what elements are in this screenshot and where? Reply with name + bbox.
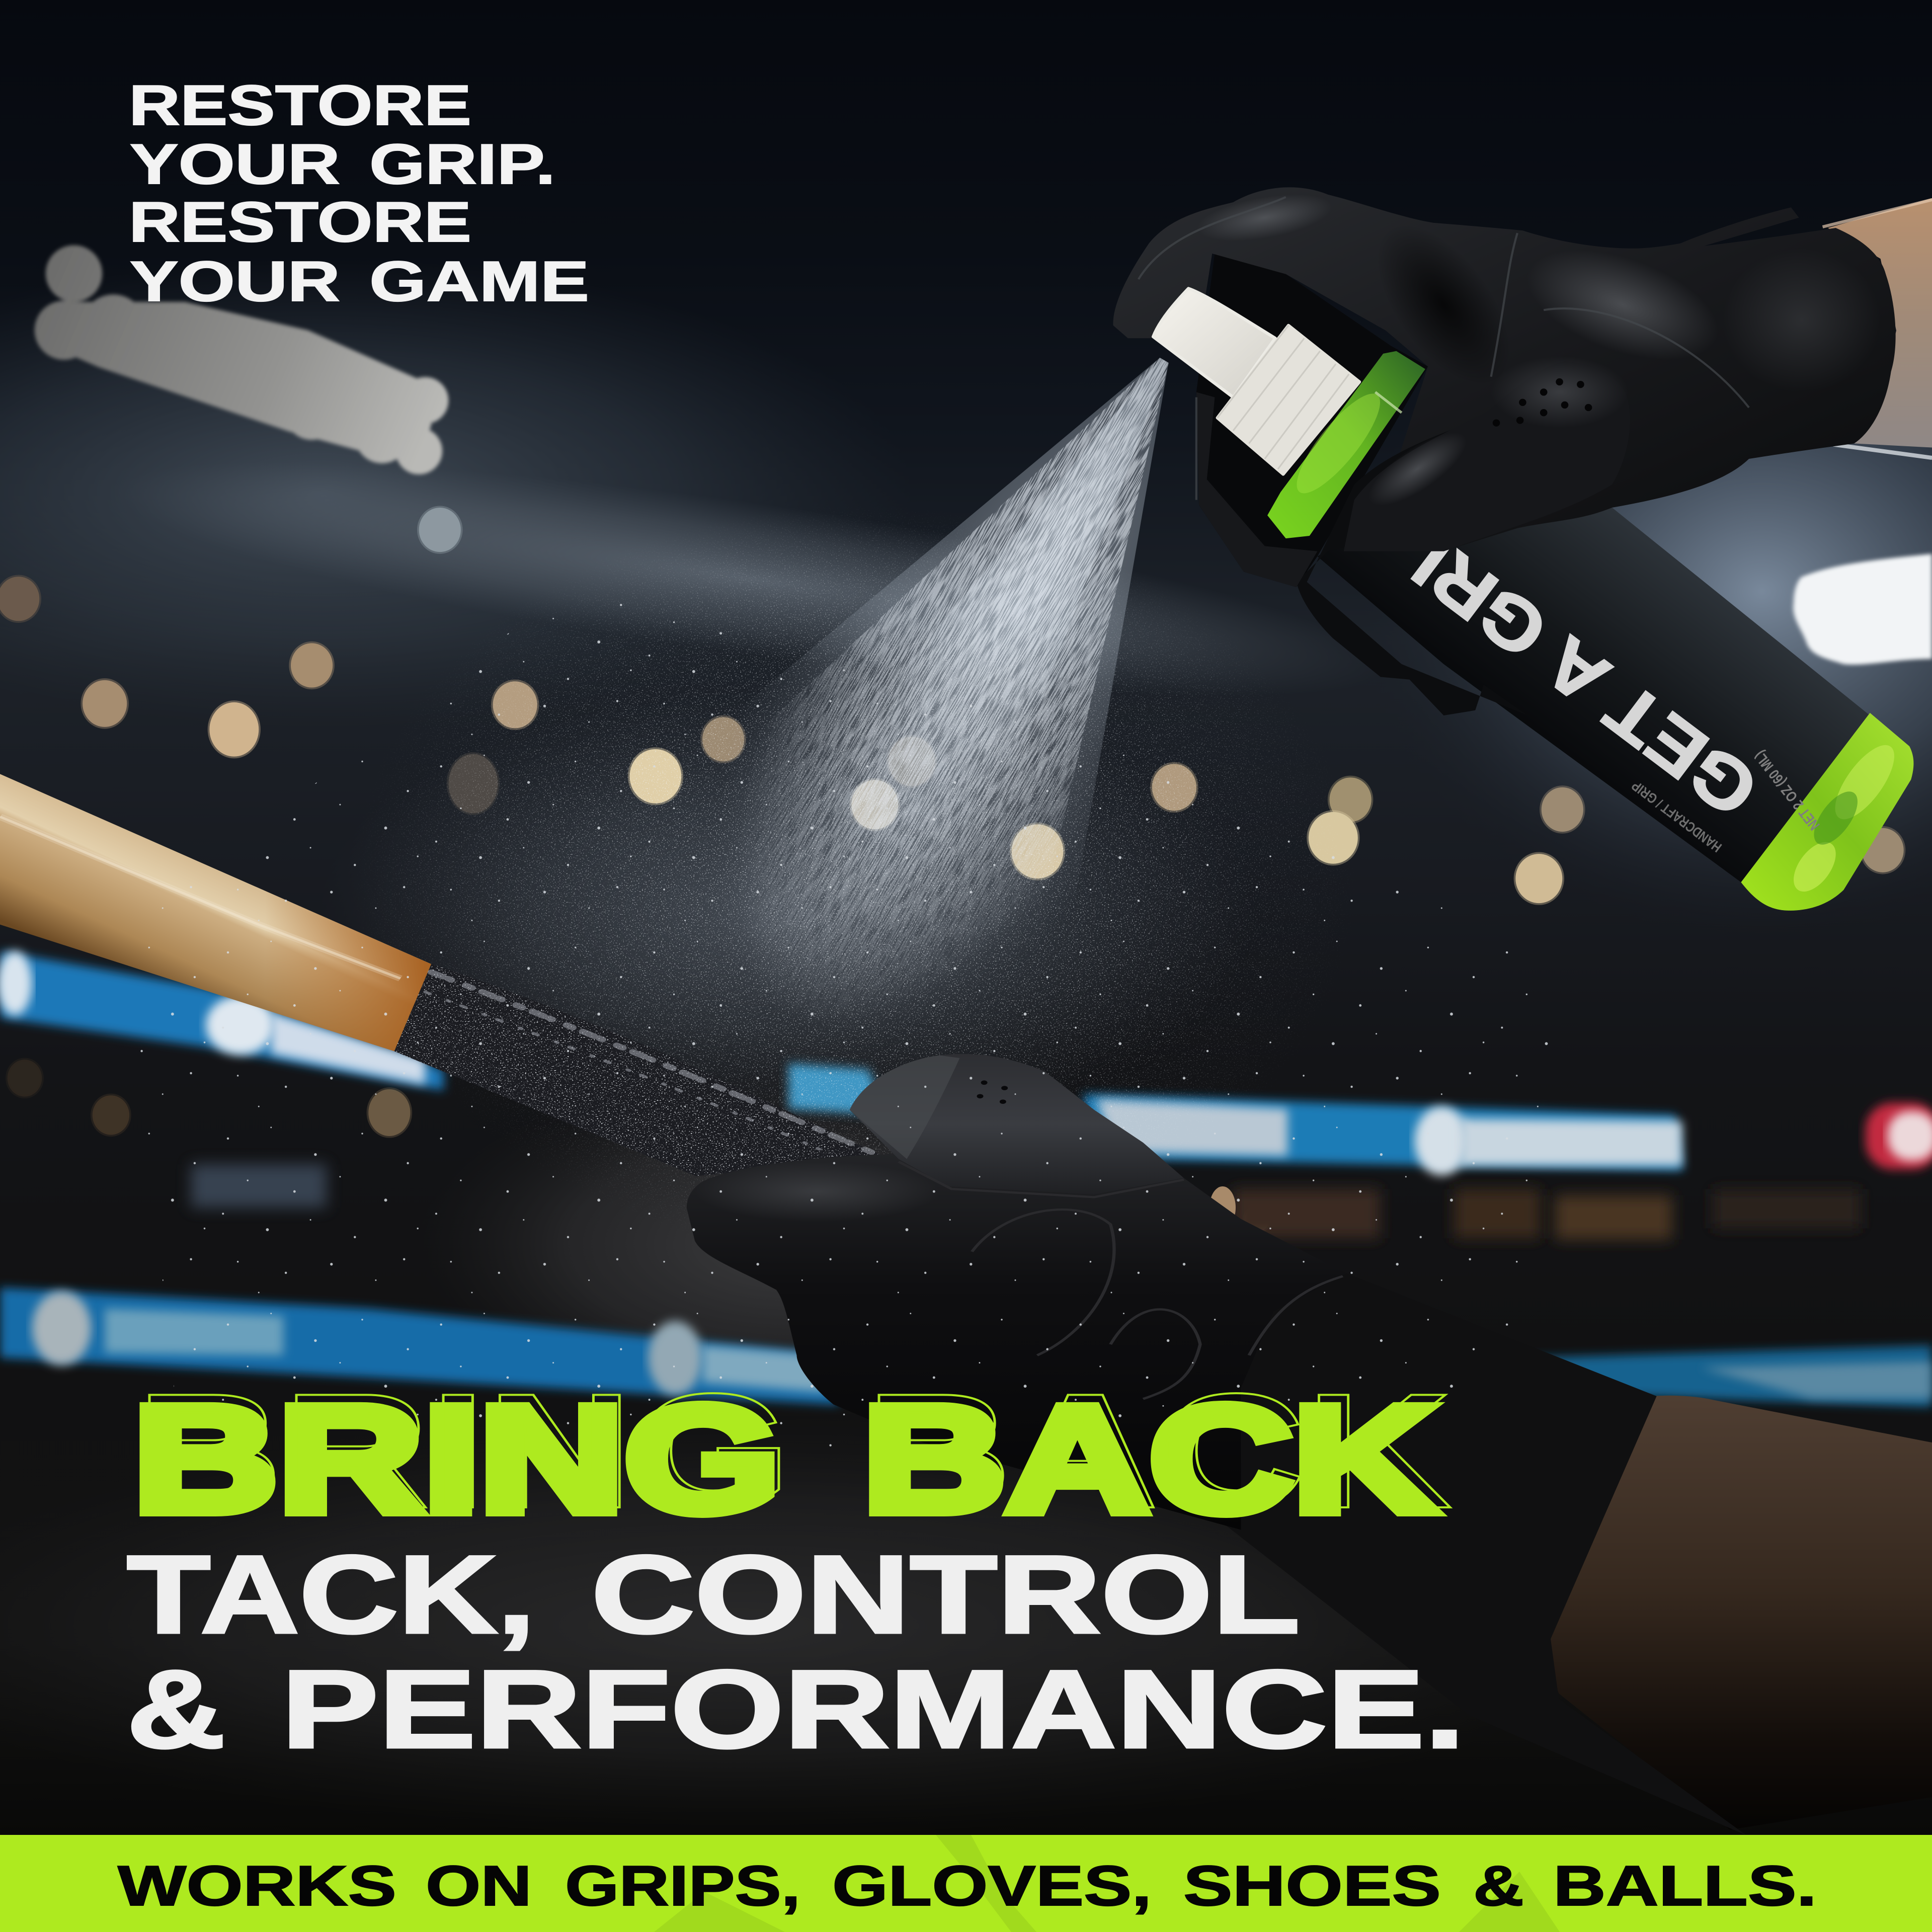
- headline: tack, control and performance: &: [127, 1647, 225, 1771]
- wrist skin peek behind lower glove: [1210, 1186, 1236, 1229]
- mist droplets: [352, 503, 1358, 1258]
- glove: highlights: [1194, 186, 1881, 518]
- glove detail lines: [899, 1162, 1343, 1399]
- thumb patch: [850, 1054, 1184, 1194]
- bring back: solid fill: BACK: [862, 1375, 1436, 1544]
- headline: bring back: [133, 1359, 1452, 1544]
- LED ribbon boards: [0, 951, 1932, 1407]
- bring back: offset outline: [136, 1359, 1452, 1542]
- floodlight: upper left bokeh cluster: [35, 245, 448, 474]
- bring back: solid fill: BRING: [133, 1375, 780, 1544]
- glove: finger loop left of cap: [1196, 392, 1317, 587]
- headline: restore your grip, restore your game: GRIP.: [369, 132, 555, 196]
- upper glove: [1113, 186, 1896, 715]
- banner text: SHOES: [1183, 1854, 1441, 1917]
- floodlight: right bright: [1793, 554, 1932, 665]
- bat: grip tape: [394, 964, 887, 1176]
- banner text: ON: [426, 1854, 532, 1917]
- headline: restore your grip, restore your game: [129, 73, 589, 313]
- headline: tack, control and performance: CONTROL: [591, 1533, 1300, 1656]
- glove: palm wrap: [1344, 361, 1630, 551]
- headline: restore your grip, restore your game: RESTORE: [129, 190, 471, 254]
- bring back: solid fill: [133, 1375, 1436, 1544]
- glove: back of hand and thumb: [1113, 187, 1896, 551]
- glove: seam lines: [1139, 197, 1749, 500]
- headline: restore your grip, restore your game: YOUR: [130, 250, 340, 313]
- bottle label text: NET 2 OZ (60 ML): [1751, 748, 1823, 833]
- scattered droplets: [126, 579, 1560, 1449]
- bottle: green base: [1741, 713, 1913, 911]
- bokeh stadium lights: [0, 508, 1904, 1232]
- spray mist cone: [352, 219, 1408, 1258]
- lower forearm: [1545, 1396, 1932, 1830]
- bring back: offset outline: BRING: [136, 1359, 791, 1542]
- backdrop: dark fingers behind cap: [1196, 254, 1428, 587]
- glove sheen: [695, 1162, 939, 1222]
- bottle: green neck: [1267, 351, 1425, 538]
- sleeve: [1225, 1273, 1746, 1835]
- banner text: GRIPS,: [565, 1854, 800, 1917]
- bottle: black label body: [1317, 479, 1870, 882]
- bottle: white spray cap: [1153, 288, 1359, 474]
- bottle label text: GET A GRI: [1398, 522, 1773, 833]
- headline: tack, control and performance: PERFORMANCE.: [281, 1647, 1465, 1771]
- knuckle mist: [850, 1056, 960, 1159]
- product bottle body: [1317, 479, 1913, 911]
- banner text: BALLS.: [1553, 1854, 1817, 1917]
- banner text: [118, 1854, 1817, 1917]
- banner text: &: [1473, 1854, 1524, 1917]
- headline: restore your grip, restore your game: YOUR: [130, 132, 340, 196]
- bat: wood barrel: [0, 774, 431, 1051]
- headline: restore your grip, restore your game: GAME: [369, 250, 589, 313]
- bottom banner: [0, 1835, 1932, 1932]
- banner text: GLOVES,: [832, 1854, 1152, 1917]
- upper forearm: [1823, 198, 1932, 458]
- headline: tack, control and performance: [127, 1533, 1465, 1771]
- baseball bat: [0, 774, 887, 1176]
- glove: lower fingers: [1297, 418, 1528, 715]
- headline: restore your grip, restore your game: RESTORE: [129, 73, 471, 137]
- banner text: WORKS: [118, 1854, 396, 1917]
- bottle label text: HANDCRAFT / GRIP: [1629, 778, 1725, 855]
- lower glove and sleeve: [687, 1054, 1746, 1835]
- glove body: [687, 1154, 1347, 1530]
- glove: perforations: [1493, 378, 1592, 427]
- headline: tack, control and performance: TACK,: [127, 1533, 535, 1656]
- bring back: offset outline: BACK: [865, 1359, 1452, 1542]
- thumb perforations: [977, 1080, 1008, 1104]
